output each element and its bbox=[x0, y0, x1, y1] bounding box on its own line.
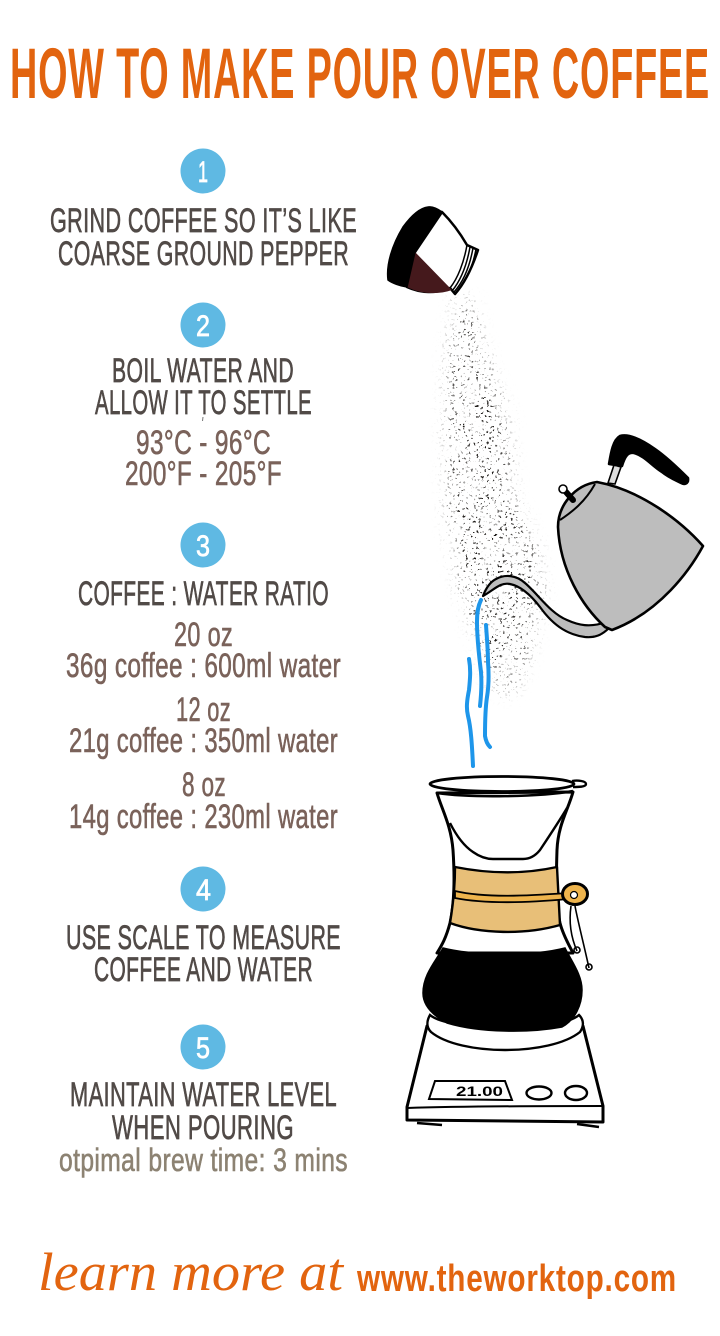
temperatures: 93°C - 96°C bbox=[136, 424, 271, 462]
ratios: 12 oz bbox=[176, 691, 231, 729]
badge 1: 1 bbox=[198, 156, 208, 189]
step 4 text: USE SCALE TO MEASURE bbox=[66, 919, 341, 957]
step 4 text bbox=[66, 919, 341, 989]
step 5 text: WHEN POURING bbox=[112, 1109, 294, 1147]
scale bbox=[407, 1015, 603, 1127]
step 1 text: COARSE GROUND PEPPER bbox=[58, 235, 349, 273]
kettle body bbox=[558, 482, 703, 630]
step 3 heading: COFFEE : WATER RATIO bbox=[78, 575, 329, 613]
leather tie bbox=[455, 891, 568, 902]
step 1 text: GRIND COFFEE SO IT’S LIKE bbox=[50, 202, 357, 240]
badge 2 bbox=[180, 302, 226, 348]
brewed coffee bbox=[423, 948, 582, 1031]
rim bbox=[430, 776, 586, 796]
step 4 bbox=[66, 866, 341, 989]
ratios: 36g coffee : 600ml water bbox=[66, 647, 341, 685]
coffee grounds spray bbox=[447, 300, 541, 690]
footer: learn more at: learn more at bbox=[38, 1242, 345, 1302]
badge 1 bbox=[180, 148, 226, 194]
badge 5 bbox=[180, 1024, 226, 1070]
badge 5: 5 bbox=[196, 1032, 210, 1065]
ratios bbox=[66, 616, 341, 836]
scale plate bbox=[427, 1015, 583, 1050]
step 2 text: ALLOW IT TO SETTLE bbox=[95, 384, 312, 422]
badge 2: 2 bbox=[196, 310, 210, 343]
step 4 text: COFFEE AND WATER bbox=[94, 951, 313, 989]
water streams bbox=[467, 600, 490, 766]
kettle handle bbox=[609, 435, 688, 484]
kettle lid bbox=[560, 484, 595, 520]
wood collar bbox=[450, 867, 560, 932]
step 5 text: MAINTAIN WATER LEVEL bbox=[70, 1076, 337, 1114]
step 5 text bbox=[70, 1076, 337, 1147]
step 2 text: BOIL WATER AND bbox=[112, 352, 294, 390]
icon: chemex carafe on scale bbox=[407, 776, 603, 1127]
badge 4: 4 bbox=[196, 874, 211, 907]
step 1 bbox=[50, 148, 357, 273]
ratios: 14g coffee : 230ml water bbox=[69, 798, 338, 836]
tie strings bbox=[570, 906, 592, 970]
step 2 text bbox=[95, 352, 312, 422]
glass carafe bbox=[437, 792, 573, 953]
badge 4 bbox=[180, 866, 226, 912]
ratios: 8 oz bbox=[182, 766, 226, 804]
wooden bead bbox=[562, 884, 588, 904]
paper filter bbox=[450, 808, 567, 859]
icon: coffee jar bbox=[388, 207, 478, 294]
ratios: 20 oz bbox=[174, 616, 233, 654]
kettle handle post bbox=[608, 465, 621, 484]
temperatures: 200°F - 205°F bbox=[125, 455, 282, 493]
badge 3 bbox=[180, 522, 226, 568]
kettle spout bbox=[483, 576, 609, 637]
scale buttons bbox=[526, 1086, 587, 1100]
step 5 bbox=[59, 1024, 348, 1178]
step 1 text bbox=[50, 202, 357, 273]
icon: kettle bbox=[483, 435, 703, 637]
scale display bbox=[429, 1081, 512, 1100]
kettle knob bbox=[559, 485, 573, 500]
ratios: 21g coffee : 350ml water bbox=[69, 722, 338, 760]
brew time note: otpimal brew time: 3 mins bbox=[59, 1142, 348, 1178]
step 3 bbox=[66, 522, 341, 836]
step 2 bbox=[95, 302, 312, 493]
temperatures bbox=[125, 424, 282, 493]
scale display: 21.00 bbox=[456, 1083, 503, 1099]
badge 3: 3 bbox=[196, 530, 210, 563]
